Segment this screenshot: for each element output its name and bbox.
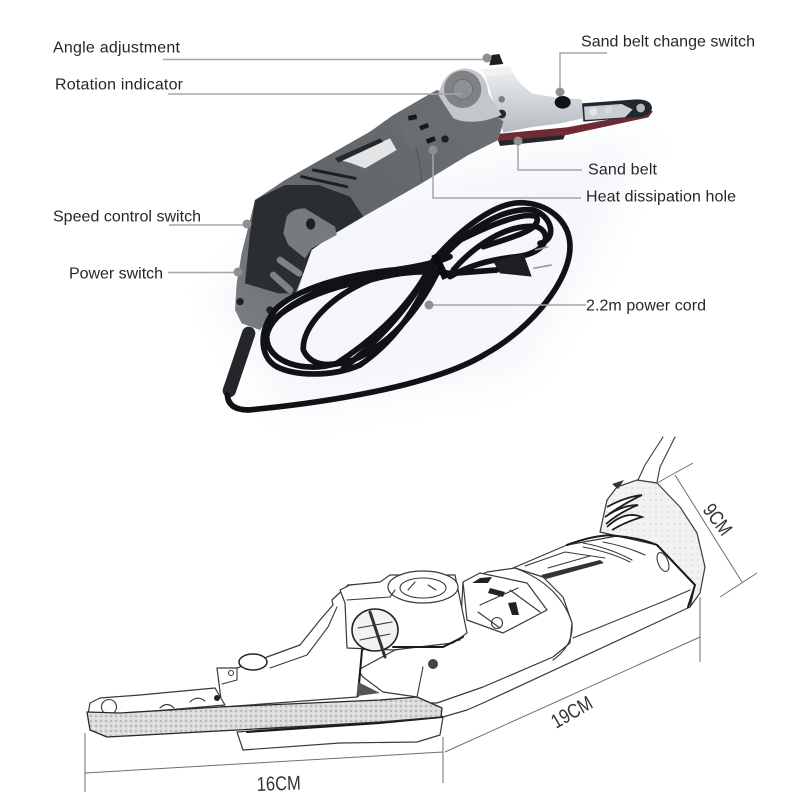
- label: sand belt: Sand belt: [588, 162, 658, 178]
- line drawing: sander: [87, 437, 705, 750]
- soft shadow: [210, 137, 647, 413]
- label: angle adjustment: Angle adjustment: [53, 40, 181, 56]
- product photo: belt sander with power cord: [210, 54, 653, 413]
- leader: heat dissipation hole: [428, 146, 581, 198]
- icon: vent block sketch: [463, 573, 547, 633]
- label: sand belt change switch: Sand belt change switch: [581, 34, 755, 50]
- dimension: 16CM: [85, 733, 443, 796]
- dimension: 9CM: 9CM: [698, 500, 736, 540]
- icon: vent slots and label: [302, 102, 452, 187]
- icon: grey grip insert: [283, 208, 337, 258]
- label: power switch: Power switch: [69, 266, 163, 282]
- leader: power switch: [168, 268, 242, 276]
- icon: sanding belt sketch: [87, 688, 442, 737]
- icon: lower plate sketch: [237, 717, 443, 750]
- icon: black grip: [245, 185, 363, 293]
- label: rotation indicator: Rotation indicator: [55, 76, 184, 94]
- leader: sand belt change switch: [556, 53, 607, 96]
- icon: dial and lock sketch: [340, 571, 467, 697]
- icon: motor body sketch: [417, 535, 695, 717]
- dimension: 16CM: 16CM: [256, 772, 301, 796]
- icon: tool body: [235, 90, 503, 330]
- icon: rotation indicator dial: [438, 68, 502, 122]
- dimension: 19CM: [445, 597, 700, 752]
- icon: power cord sketch: [638, 437, 675, 482]
- icon: rear cap sketch: [600, 480, 705, 607]
- icon: sanding arm sketch: [217, 583, 400, 707]
- leader: power cord: [424, 300, 586, 310]
- label: speed control switch: Speed control switch: [53, 208, 201, 226]
- icon: tail holes: [236, 298, 274, 314]
- leader: angle adjustment: [163, 54, 492, 62]
- icon: gear housing sketch: [358, 568, 572, 703]
- icon: sanding arm and belt: [480, 54, 653, 146]
- icon: power cord: [227, 203, 570, 410]
- dimension: 9CM: [657, 463, 757, 597]
- label: power cord length: 2.2m power cord: [586, 298, 706, 314]
- dimension: 19CM: 19CM: [548, 692, 597, 733]
- leader: speed control switch: [169, 220, 252, 228]
- leader: rotation indicator: [168, 88, 470, 97]
- label: heat dissipation hole: Heat dissipation hole: [586, 188, 736, 206]
- leader: sand belt: [514, 136, 582, 170]
